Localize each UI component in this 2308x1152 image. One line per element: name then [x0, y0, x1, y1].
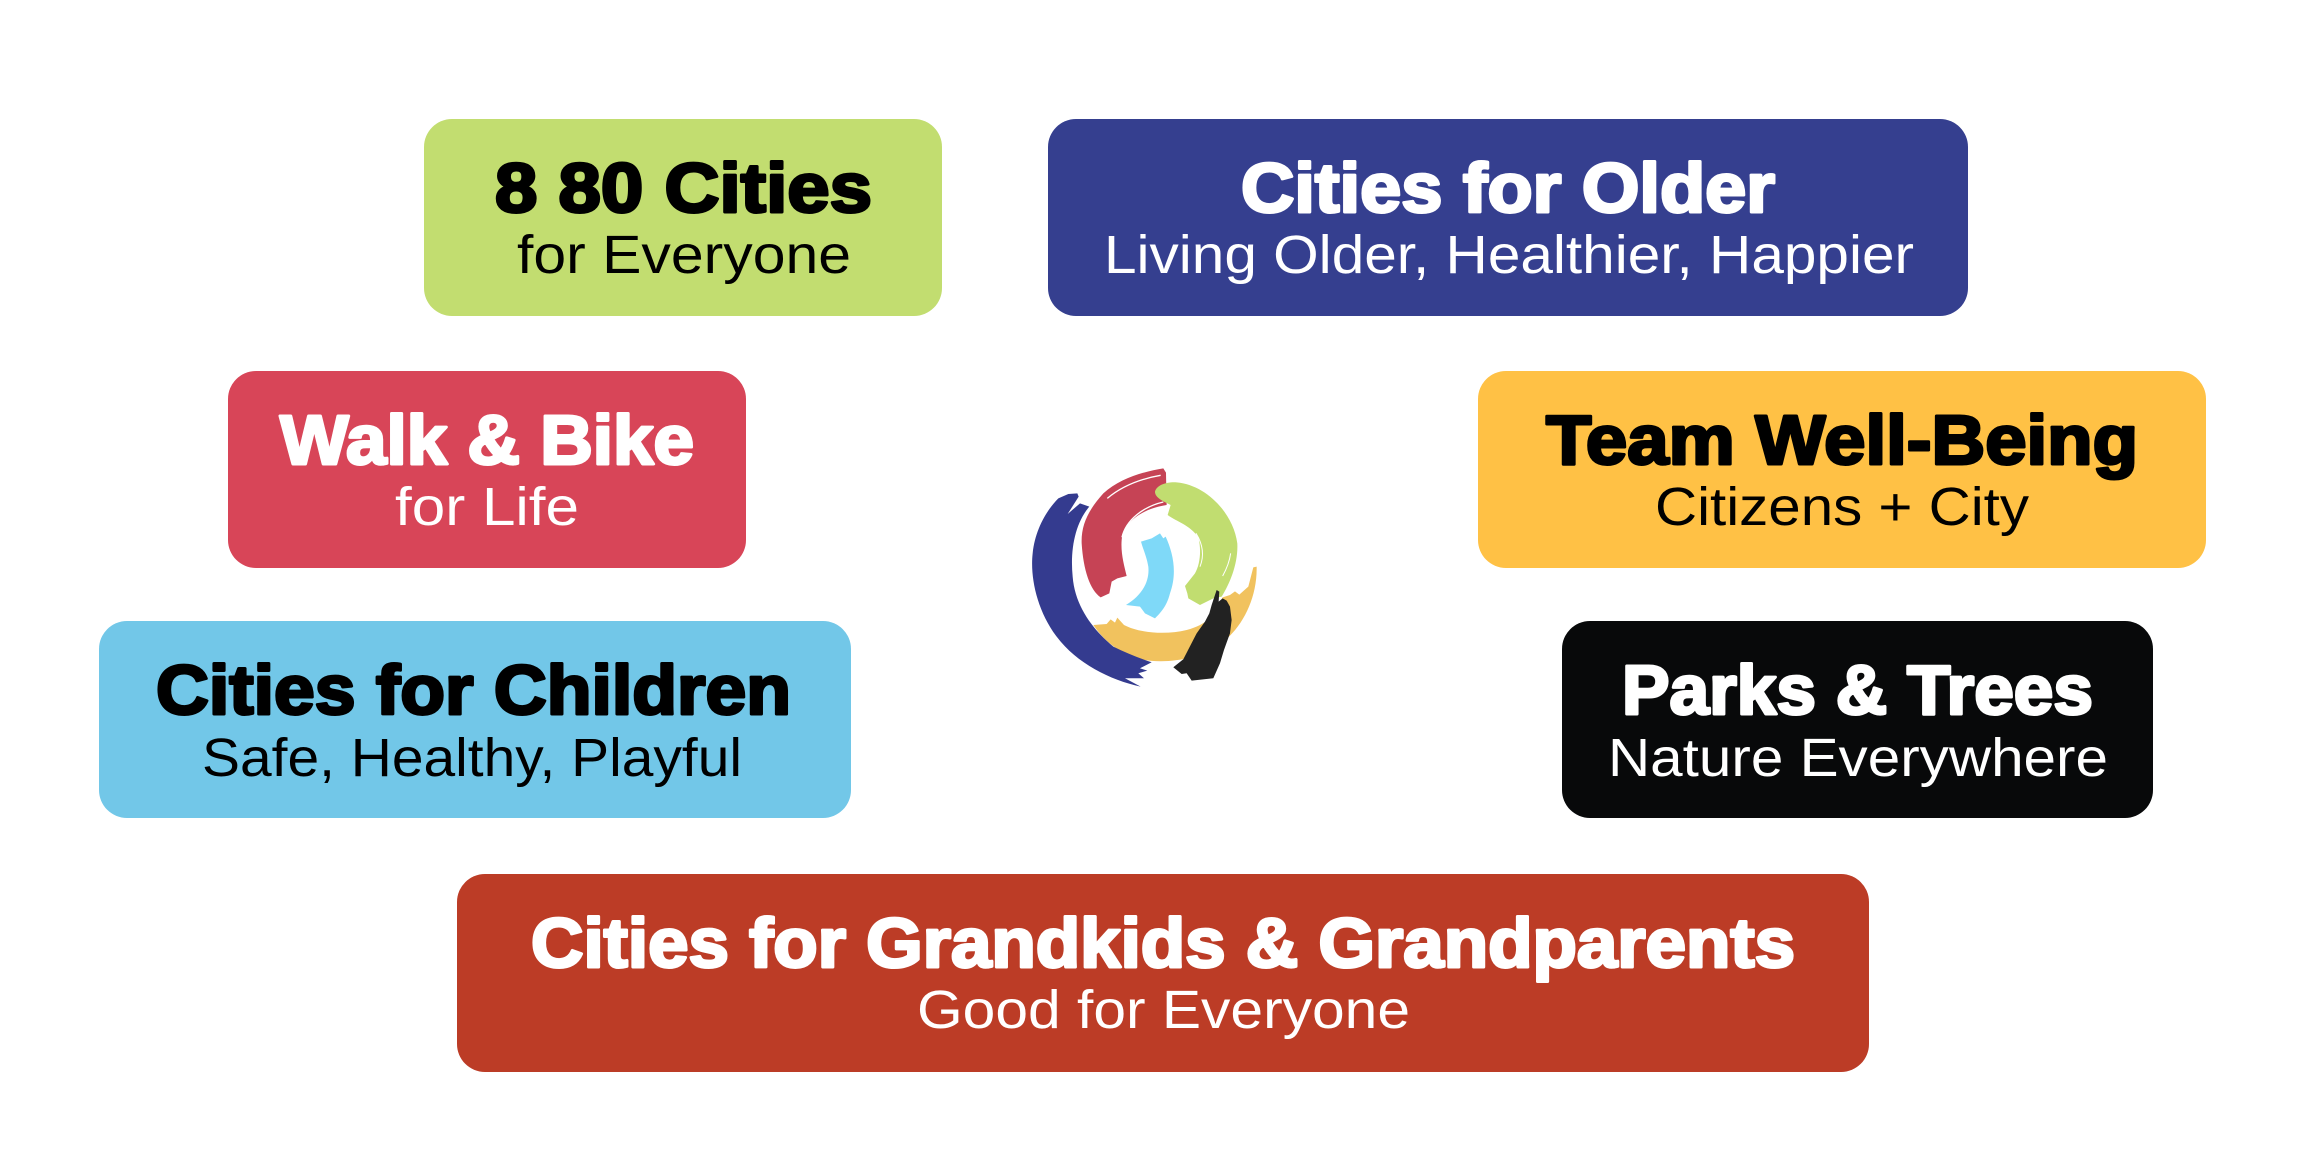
text: Good for Everyone: Good for Everyone: [917, 980, 1410, 1040]
text: Living Older, Healthier, Happier: Living Older, Healthier, Happier: [1104, 225, 1914, 285]
text: Citizens + City: Citizens + City: [1655, 477, 2029, 537]
text: for Everyone: for Everyone: [517, 225, 851, 285]
panel: Cities for Older: [1048, 119, 1968, 316]
heading: Cities for Children: Cities for Children: [156, 651, 791, 729]
text: for Life: for Life: [395, 477, 579, 537]
heading: Cities for Grandkids & Grandparents: Cities for Grandkids & Grandparents: [531, 904, 1795, 982]
panel: Cities for Children: [99, 621, 851, 818]
heading: Team Well-Being: Team Well-Being: [1546, 401, 2138, 479]
heading: Cities for Older: Cities for Older: [1241, 149, 1775, 227]
panel: Parks & Trees: [1562, 621, 2153, 818]
panel: Team Well-Being: [1478, 371, 2206, 568]
heading: 8 80 Cities: 8 80 Cities: [495, 149, 872, 227]
heading: Walk & Bike: Walk & Bike: [280, 401, 694, 479]
text: Nature Everywhere: Nature Everywhere: [1608, 728, 2108, 788]
panel: Walk & Bike: [228, 371, 746, 568]
panel: 8 80 Cities: [424, 119, 942, 316]
heading: Parks & Trees: Parks & Trees: [1622, 651, 2093, 729]
icon: brush-stroke circle logo: [1032, 468, 1257, 687]
text: Safe, Healthy, Playful: Safe, Healthy, Playful: [202, 728, 742, 788]
panel: Cities for Grandkids & Grandparents: [457, 874, 1869, 1072]
